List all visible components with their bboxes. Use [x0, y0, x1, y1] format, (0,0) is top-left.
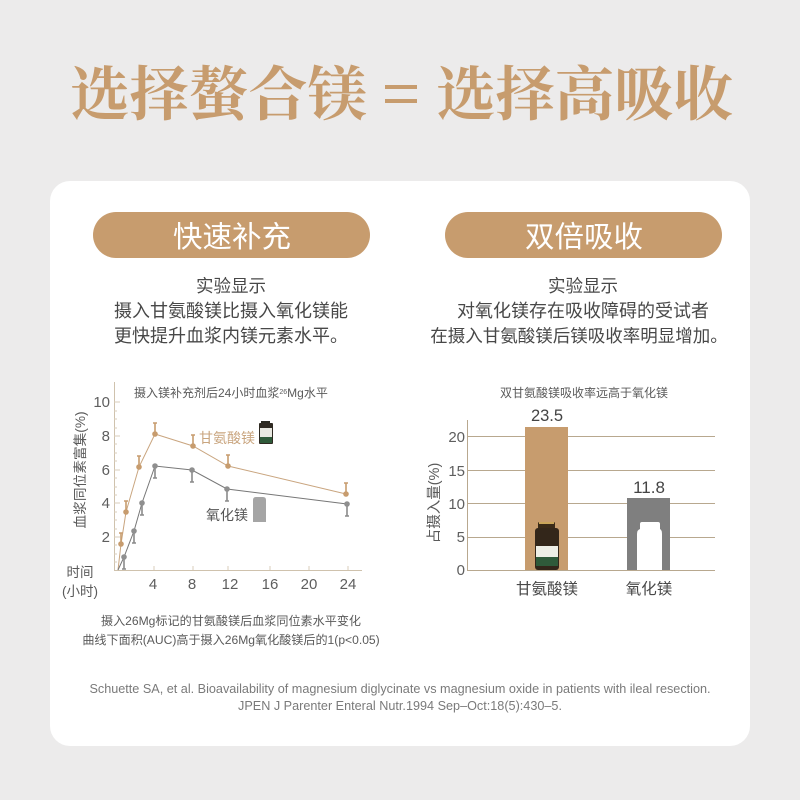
x axis label: [62, 565, 98, 599]
text block: right description: 在摄入甘氨酸镁后镁吸收率明显增加。: [430, 326, 728, 346]
citation: [89, 682, 711, 713]
y axis numbers: 5: [457, 529, 465, 546]
title: 选择高吸收: [436, 47, 733, 132]
y axis numbers: 15: [448, 463, 465, 480]
icon: small product bottle: [259, 421, 273, 444]
x axis numbers: 8: [188, 576, 196, 593]
title: [70, 47, 733, 132]
y axis numbers: 20: [448, 429, 465, 446]
x axis numbers: [149, 576, 356, 593]
y axis numbers: 4: [102, 495, 110, 512]
pill heading: 快速补充: 快速补充: [173, 221, 291, 254]
chart caption: 曲线下面积(AUC)高于摄入26Mg氧化酸镁后的1(p<0.05): [82, 632, 380, 647]
chart title: 双甘氨酸镁吸收率远高于氧化镁: [500, 385, 668, 400]
y axis numbers: [448, 429, 465, 579]
y axis numbers: 0: [457, 562, 465, 579]
axes: [114, 382, 362, 570]
bar labels: 氧化镁: [626, 580, 672, 598]
bar: 甘氨酸镁: 23.5: [531, 407, 563, 425]
y axis numbers: 2: [102, 529, 110, 546]
series label: 氧化镁: 氧化镁: [206, 507, 248, 523]
citation: JPEN J Parenter Enteral Nutr.1994 Sep–Oct:18(5):430–5.: [238, 699, 562, 713]
y axis label: 血浆同位素富集(%): [72, 411, 88, 529]
text block: left description: 实验显示: [196, 276, 266, 296]
y axis numbers: 6: [102, 462, 110, 479]
icon: product bottle on tan bar: [535, 522, 559, 570]
y axis numbers: 8: [102, 428, 110, 445]
text block: right description: [430, 276, 728, 346]
bar chart: absorption rate: [426, 385, 715, 598]
pill heading: 双倍吸收: [445, 212, 722, 258]
text block: right description: 对氧化镁存在吸收障碍的受试者: [457, 301, 709, 321]
chart caption: [82, 613, 380, 647]
bar: 甘氨酸镁: [525, 407, 568, 570]
grid lines: [467, 420, 715, 570]
text block: right description: 实验显示: [548, 276, 618, 296]
bar: 氧化镁: 11.8: [633, 478, 665, 497]
bar labels: [516, 580, 672, 598]
icon: white bottle on gray bar: [637, 522, 662, 570]
text block: left description: [114, 276, 348, 346]
x axis numbers: 24: [340, 576, 356, 593]
y axis numbers: 10: [448, 496, 465, 513]
series: magnesium glycinate: [118, 423, 349, 570]
pill heading: 快速补充: [93, 212, 370, 258]
x axis numbers: 4: [149, 576, 157, 593]
citation: Schuette SA, et al. Bioavailability of magnesium diglycinate vs magnesium oxide in patients with ileal resection.: [89, 682, 711, 696]
chart title: 摄入镁补充剂后24小时血浆: [134, 386, 279, 400]
line chart: plasma isotope enrichment: [62, 382, 380, 647]
chart title: 26: [279, 389, 287, 396]
x axis numbers: 20: [301, 576, 317, 593]
pill heading: 双倍吸收: 双倍吸收: [525, 221, 643, 254]
panel: white card: [50, 181, 750, 746]
x axis label: 时间: [66, 565, 94, 580]
y axis numbers: 10: [93, 394, 110, 411]
text block: left description: 更快提升血浆内镁元素水平。: [114, 326, 348, 346]
x axis label: (小时): [62, 584, 98, 599]
bar: 氧化镁: [627, 478, 670, 570]
chart caption: 摄入26Mg标记的甘氨酸镁后血浆同位素水平变化: [101, 613, 361, 628]
text block: left description: 摄入甘氨酸镁比摄入氧化镁能: [114, 301, 348, 321]
chart title: Mg水平: [287, 386, 328, 400]
icon: gray bottle: [253, 497, 266, 522]
bar labels: 甘氨酸镁: [516, 580, 578, 598]
y axis label: 占摄入量(%): [426, 463, 443, 543]
series: magnesium oxide: [118, 463, 350, 570]
x axis numbers: 16: [262, 576, 278, 593]
title: 选择螯合镁: [70, 47, 367, 132]
series label: 甘氨酸镁: 甘氨酸镁: [199, 430, 255, 446]
y axis numbers: [93, 394, 110, 546]
x axis numbers: 12: [222, 576, 238, 593]
